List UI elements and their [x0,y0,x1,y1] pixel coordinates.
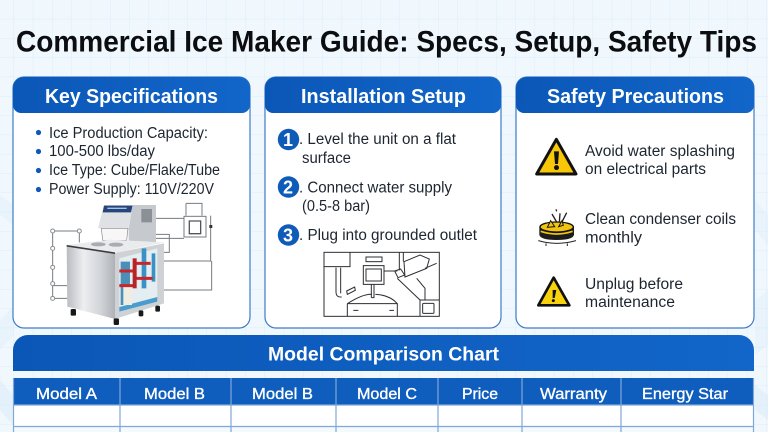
panel: model comparison chart [13,335,754,432]
table header row: Model C [357,386,417,403]
table body rows [13,378,754,432]
table header row [13,378,754,405]
heading: installation setup [265,77,501,113]
heading: model comparison chart [13,335,754,371]
specification list: Ice Type: Cube/Flake/Tube [49,162,220,179]
installation line drawing [324,252,439,316]
step 1 [278,129,457,167]
ice maker machine diagram [51,203,212,325]
safety tip: clean condenser coils: Clean condenser coils [585,211,736,228]
icon: warning triangle for unplugging [538,278,569,305]
step 3: . Plug into grounded outlet [299,227,478,244]
safety tip: water splashing: Avoid water splashing [585,143,735,160]
step 2 [278,176,452,215]
safety tip: unplug before maintenance: Unplug before [585,276,683,293]
table header row: Price [462,386,498,403]
specification list: 100-500 lbs/day [49,143,155,160]
step 2: 2 [283,178,293,198]
heading: model comparison chart: Model Comparison Chart [268,344,500,366]
step 2: (0.5-8 bar) [302,198,370,215]
panel: installation setup [265,77,501,328]
safety tip: unplug before maintenance: maintenance [585,294,675,311]
step 1: surface [302,150,351,167]
step 2: . Connect water supply [299,180,452,196]
table header row: Model B [252,386,313,403]
step 1: 1 [283,130,293,150]
heading: safety precautions [516,77,754,113]
table header row: Energy Star [642,386,729,403]
safety tip: clean condenser coils: monthly [585,230,642,246]
step 1: . Level the unit on a flat [299,131,457,148]
panel: key specifications [13,77,250,328]
specification list: Power Supply: 110V/220V [49,181,215,198]
heading: safety precautions: Safety Precautions [547,86,724,108]
panel: safety precautions [516,77,754,328]
heading: key specifications: Key Specifications [45,86,218,108]
table header row: Warranty [540,386,607,403]
heading: installation setup: Installation Setup [301,86,466,108]
icon: condenser coil cleaning [538,209,576,246]
safety tip: water splashing [585,143,735,178]
heading: key specifications [13,77,250,113]
safety tip: water splashing: on electrical parts [585,161,706,178]
table header row: Model A [36,386,97,403]
table header row: Model B [144,386,205,403]
specification list [36,125,220,198]
specification list: Ice Production Capacity: [49,125,208,142]
icon: warning triangle with exclamation mark [537,139,576,174]
safety tip: clean condenser coils [585,211,736,246]
step 3: 3 [283,226,293,246]
safety tip: unplug before maintenance [585,276,683,311]
